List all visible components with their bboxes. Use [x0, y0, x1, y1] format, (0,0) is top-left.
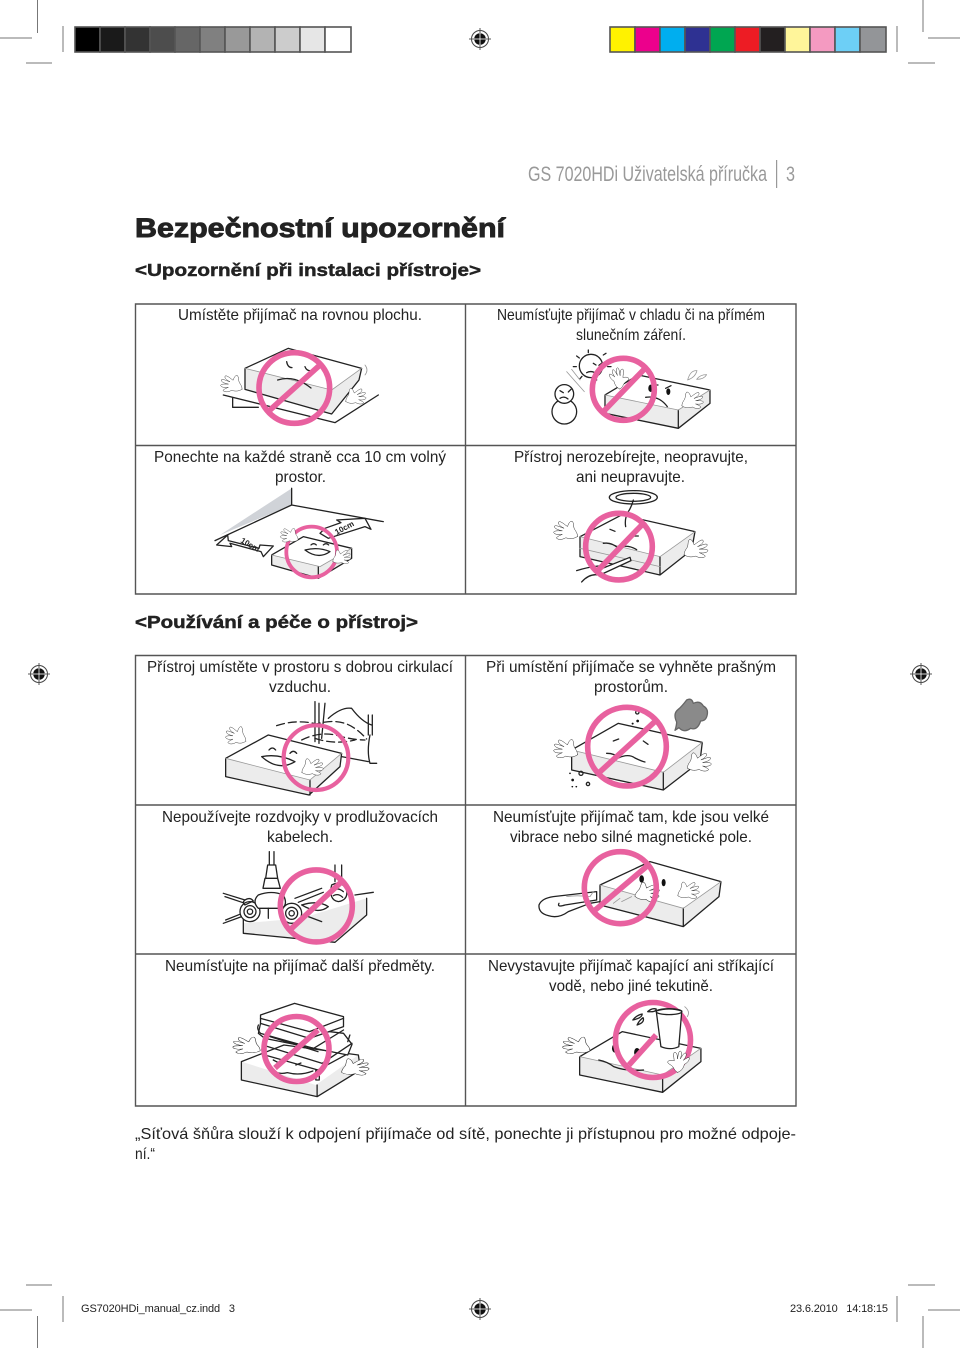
- running header: 3: [786, 163, 795, 186]
- cell: no liquids: [488, 958, 775, 1092]
- text: [486, 659, 776, 696]
- text: [514, 449, 748, 486]
- text: Umístěte přijímač na rovnou plochu.: [178, 307, 422, 324]
- text: [493, 809, 769, 846]
- text: Přístroj umístěte v prostoru s dobrou cirkulací: [147, 659, 454, 676]
- text: prostor.: [275, 469, 326, 486]
- text: [154, 449, 446, 486]
- footer: file name: GS7020HDi_manual_cz.indd 3: [81, 1303, 235, 1315]
- note: mains cord: „Síťová šňůra slouží k odpojení přijímače od sítě, ponechte ji přístupnou pro možné odpoje-: [135, 1125, 796, 1143]
- illustration: ventilated box: [226, 702, 377, 795]
- text: [162, 809, 438, 846]
- cell: vibration and magnets: [493, 809, 769, 927]
- text: [497, 307, 765, 344]
- illustration: halo and screwdriver: [554, 491, 708, 582]
- title: Bezpečnostní upozornění: [135, 213, 507, 243]
- cell: clearance: [154, 449, 446, 578]
- heading: installation: <Upozornění při instalaci přístroje>: [135, 260, 481, 280]
- text: Při umístění přijímače se vyhněte prašným: [486, 659, 776, 676]
- text: kabelech.: [267, 829, 333, 846]
- text: ani neupravujte.: [576, 469, 685, 486]
- cell: dust: [486, 659, 776, 790]
- illustration: magnet and box: [539, 852, 721, 927]
- panel: use and care table: [136, 656, 796, 1106]
- panel: installation table: [136, 304, 796, 594]
- cell: air circulation: [147, 659, 454, 795]
- text: prostorům.: [594, 678, 668, 696]
- text: Ponechte na každé straně cca 10 cm volný: [154, 449, 446, 466]
- registration mark: right: [910, 663, 932, 685]
- note: mains cord: [135, 1125, 796, 1163]
- note: mains cord: ní.“: [135, 1146, 155, 1163]
- illustration: glass in front of sign: [633, 1007, 692, 1074]
- table grid: [136, 304, 796, 594]
- text: Neumísťujte na přijímač další předměty.: [165, 958, 435, 975]
- illustration: 10 cm clearance: 10cm: [333, 519, 356, 537]
- text: Nevystavujte přijímač kapající ani stříkající: [488, 958, 775, 975]
- text: vzduchu.: [269, 679, 331, 696]
- footer: date and time: 23.6.2010 14:18:15: [790, 1303, 888, 1315]
- illustration: glass and box: [563, 1032, 701, 1092]
- text: vibrace nebo silné magnetické pole.: [510, 829, 752, 846]
- illustration: books on box: [233, 1003, 369, 1097]
- registration mark: top: [469, 28, 491, 50]
- text: slunečním záření.: [576, 327, 686, 344]
- color calibration strip: [610, 27, 886, 52]
- heading: use and care: <Používání a péče o přístroj>: [135, 612, 418, 632]
- prohibition sign: [616, 1002, 690, 1078]
- cell: no objects on top: [165, 958, 435, 1097]
- table grid: [136, 656, 796, 1106]
- grayscale calibration strip: [75, 27, 351, 52]
- text: vodě, nebo jiné tekutině.: [549, 978, 713, 995]
- registration mark: bottom: [469, 1298, 491, 1320]
- illustration: 10 cm clearance: [215, 488, 383, 578]
- registration mark: left: [28, 663, 50, 685]
- text: Nepoužívejte rozdvojky v prodlužovacích: [162, 809, 438, 826]
- cell: do not disassemble: [514, 449, 748, 582]
- illustration: box on uneven surface: [221, 348, 378, 423]
- illustration: sun, snowman and box: [552, 350, 710, 428]
- illustration: overloaded power strip: [223, 852, 373, 942]
- cell: extension cords: [162, 809, 438, 942]
- illustration: 10 cm clearance: 10cm: [239, 536, 261, 554]
- text: [488, 958, 775, 995]
- text: Neumísťujte přijímač tam, kde jsou velké: [493, 809, 769, 826]
- text: [147, 659, 454, 696]
- running header: GS 7020HDi Uživatelská příručka: [528, 163, 767, 186]
- text: Přístroj nerozebírejte, neopravujte,: [514, 449, 748, 466]
- prohibition sign: [264, 1016, 329, 1082]
- text: Neumísťujte přijímač v chladu či na přímém: [497, 307, 765, 324]
- cell: heat and cold: [497, 307, 765, 428]
- illustration: dusty box: [554, 699, 711, 790]
- cell: flat surface: [178, 307, 422, 423]
